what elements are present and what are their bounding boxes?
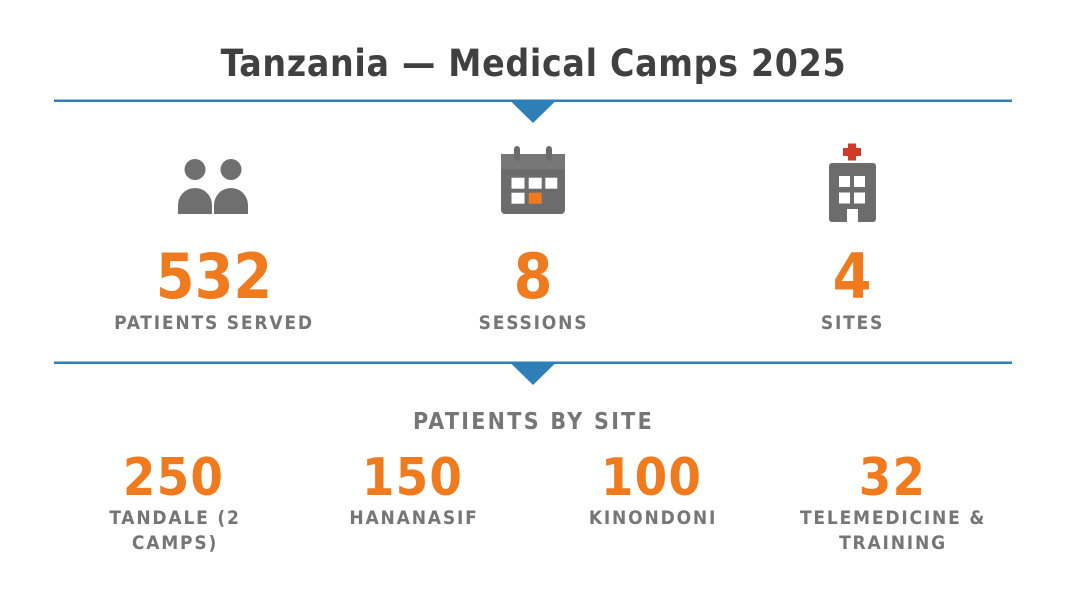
stat: 4: 4	[833, 240, 871, 313]
panel: patients served	[114, 159, 314, 334]
label: hananasif: HANANASIF	[349, 507, 479, 529]
panel: tandale	[109, 448, 241, 554]
stat: 8: 8	[514, 240, 552, 313]
icon: calendar	[501, 146, 565, 214]
panel: kinondoni	[589, 448, 717, 529]
panel: sites	[821, 144, 884, 334]
top divider with arrow	[54, 100, 1012, 123]
label: tandale: TANDALE (2	[109, 507, 241, 529]
middle divider with arrow	[54, 362, 1012, 385]
icon: two people	[178, 159, 248, 214]
label: patients served: PATIENTS SERVED	[114, 312, 314, 334]
panel: tandale: CAMPS)	[132, 532, 218, 554]
label: sessions: SESSIONS	[479, 312, 588, 334]
panel: hananasif	[349, 448, 479, 529]
panel: telemedicine and training: TRAINING	[839, 532, 947, 554]
stat: 150: 150	[362, 448, 463, 508]
section heading: patients by site: PATIENTS BY SITE	[413, 409, 654, 435]
stat: 32: 32	[859, 448, 926, 508]
icon: hospital	[829, 144, 876, 222]
stat: 532: 532	[156, 240, 272, 313]
label: kinondoni: KINONDONI	[589, 507, 717, 529]
label: sites: SITES	[821, 312, 884, 334]
stat: 250: 250	[123, 448, 224, 508]
panel: sessions	[479, 146, 588, 334]
label: telemedicine and training: TELEMEDICINE &	[800, 507, 986, 529]
panel: telemedicine and training	[800, 448, 986, 554]
stat: 100: 100	[601, 448, 702, 508]
title: Tanzania — Medical Camps 2025	[221, 42, 846, 85]
